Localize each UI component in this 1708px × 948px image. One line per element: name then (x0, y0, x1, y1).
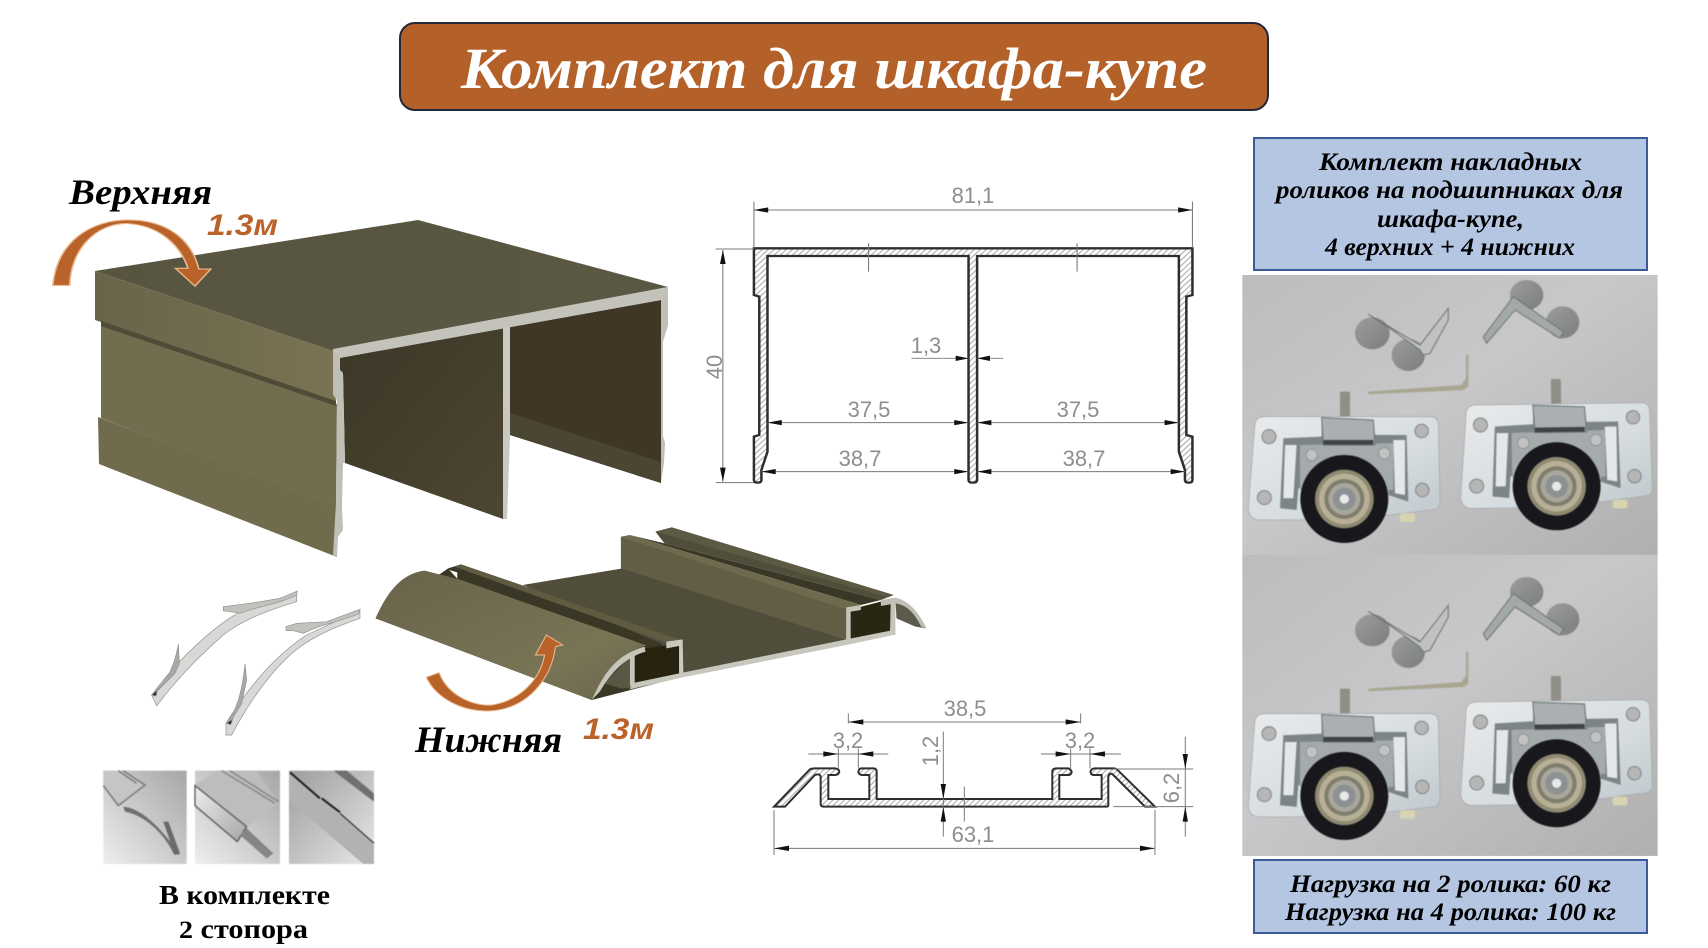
stopper caption: В комплекте (159, 880, 330, 910)
rollers description box (1254, 138, 1647, 270)
lower rail product view (375, 527, 926, 700)
stopper photos (103, 771, 374, 864)
upper rail product view (95, 220, 668, 557)
lower rail technical drawing: 3,2 (1065, 728, 1095, 753)
lower rail technical drawing: 3,2 (833, 728, 863, 753)
upper rail technical drawing: 38,7 (839, 446, 881, 471)
length: lower rail: 1.3м (583, 713, 654, 746)
photo: roller set lower (1242, 555, 1658, 856)
rollers description box: Комплект накладных (1318, 149, 1582, 176)
upper rail technical drawing (702, 183, 1192, 483)
lower rail technical drawing: 6,2 (1159, 773, 1184, 803)
lower rail technical drawing: 1,2 (918, 736, 943, 766)
load capacity box: Нагрузка на 2 ролика: 60 кг (1289, 871, 1611, 898)
photo: roller set upper (1242, 275, 1658, 555)
label: lower rail: Нижняя (414, 720, 562, 761)
upper rail technical drawing: 38,7 (1063, 446, 1105, 471)
lower rail technical drawing: 63,1 (952, 822, 994, 847)
title: Комплект для шкафа-купе (460, 36, 1207, 101)
stopper caption: 2 стопора (179, 914, 309, 944)
rollers description box: 4 верхних + 4 нижних (1324, 234, 1575, 261)
arrow: upper rail (53, 220, 211, 286)
lower rail technical drawing: 38,5 (944, 696, 986, 721)
label: upper rail: Верхняя (68, 172, 212, 212)
upper rail technical drawing: 37,5 (1057, 397, 1099, 422)
load capacity box (1254, 860, 1647, 933)
upper rail technical drawing: 40 (702, 355, 727, 379)
lower rail technical drawing (774, 696, 1193, 855)
length: upper rail: 1.3м (207, 209, 278, 242)
load capacity box: Нагрузка на 4 ролика: 100 кг (1284, 899, 1616, 926)
stopper caption (159, 880, 330, 944)
title (400, 23, 1268, 110)
upper rail technical drawing: 81,1 (952, 183, 994, 208)
upper rail technical drawing: 1,3 (911, 333, 941, 358)
rollers description box: роликов на подшипниках для (1274, 177, 1623, 204)
rollers description box: шкафа-купе, (1377, 206, 1524, 233)
arrow: lower rail (426, 635, 563, 711)
stoppers (152, 591, 360, 735)
upper rail technical drawing: 37,5 (848, 397, 890, 422)
